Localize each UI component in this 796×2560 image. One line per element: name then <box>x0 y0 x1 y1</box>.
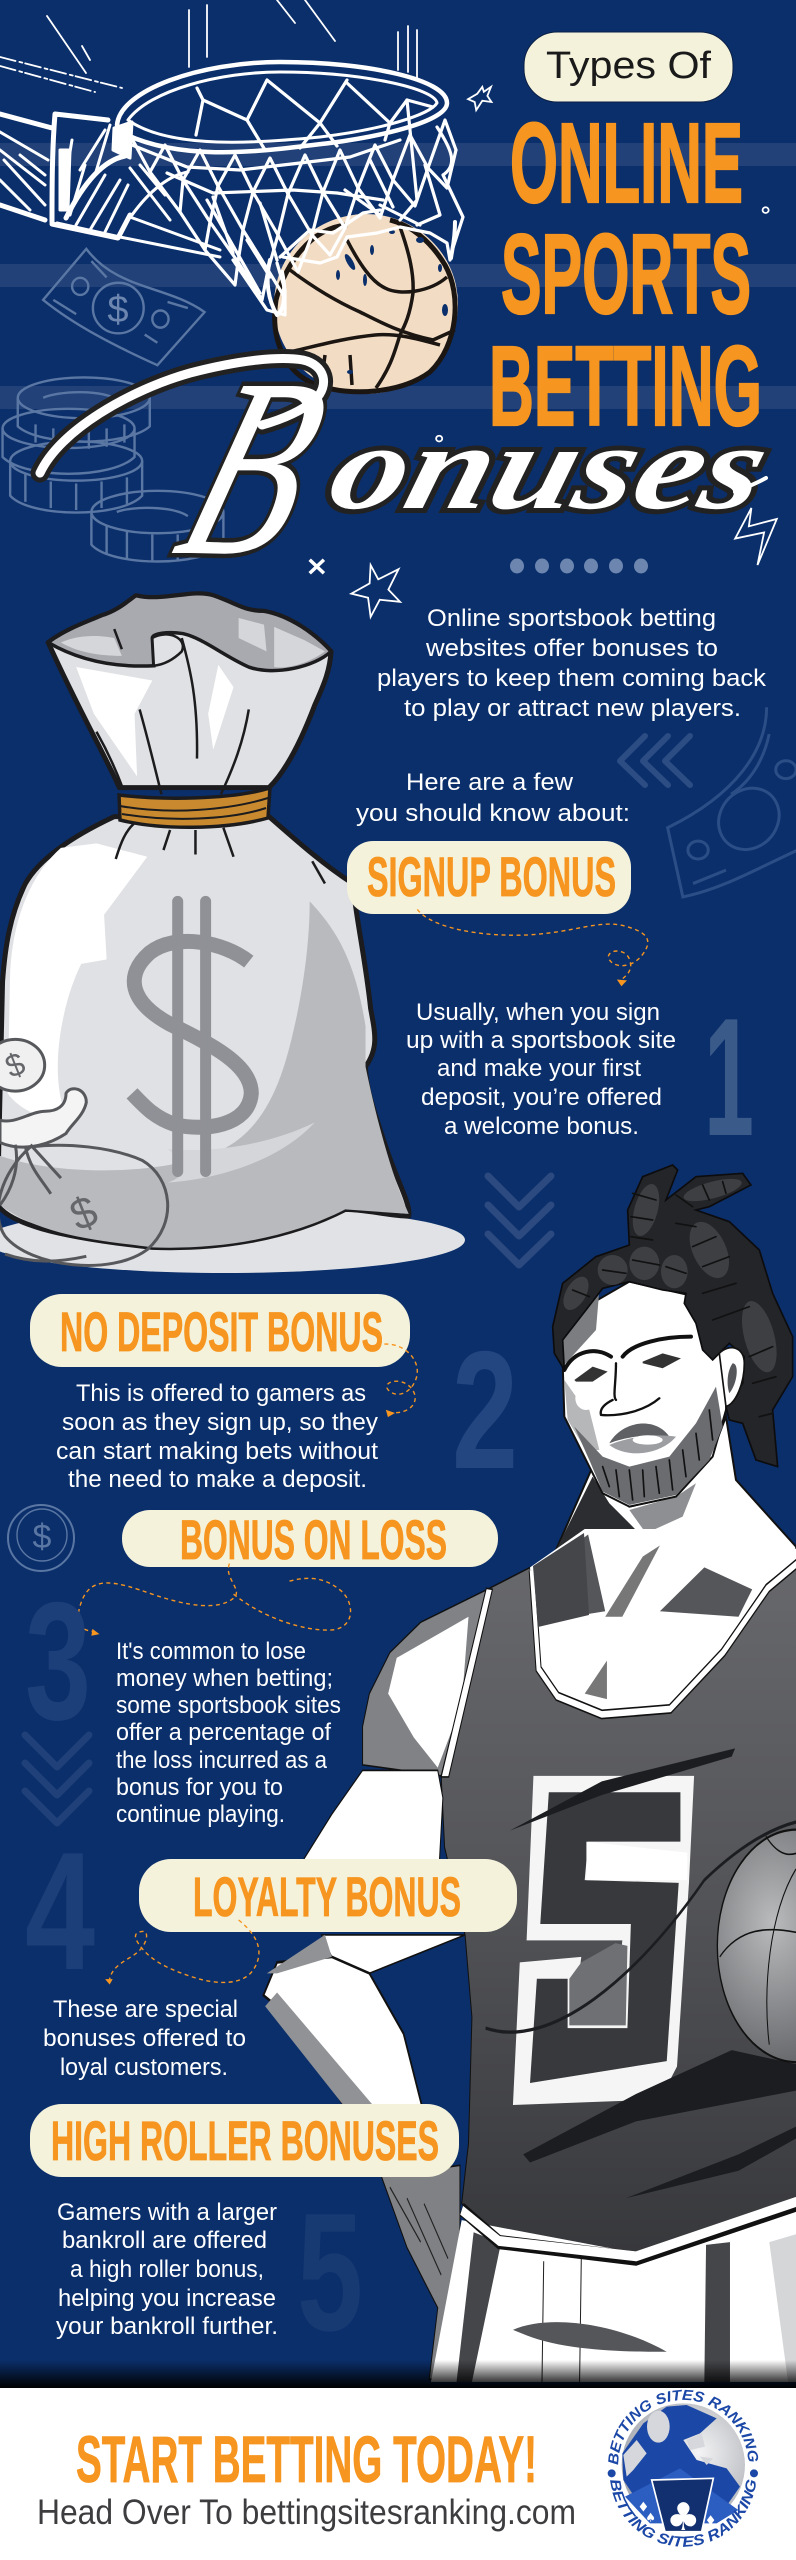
left trapezius and pec shading <box>533 1533 589 1627</box>
bonus on loss text <box>116 1638 341 1828</box>
neck and shoulders <box>536 1417 796 1577</box>
icon: dollar sign on bill: $ <box>107 289 129 331</box>
high roller text: Gamers with a larger <box>57 2199 277 2226</box>
high roller text: helping you increase <box>58 2285 276 2312</box>
number 1: 1 <box>704 983 754 1171</box>
logo: betting sites ranking: ♦ <box>705 2514 717 2529</box>
flourish on the B <box>40 359 324 473</box>
script title: Bonuses <box>40 326 783 608</box>
panel: high roller heading: HIGH ROLLER BONUSES <box>51 2109 439 2172</box>
basketball <box>274 214 458 394</box>
background stripes <box>0 143 796 409</box>
number 4: 4 <box>25 1817 95 2005</box>
pagination dots <box>510 558 648 574</box>
chevrons down <box>488 1176 551 1265</box>
website: Head Over To bettingsitesranking.com <box>37 2493 576 2532</box>
nose and lips <box>601 1363 659 1415</box>
eyes <box>574 1353 681 1382</box>
shoulder <box>363 1589 487 1776</box>
jersey <box>263 1529 796 2382</box>
number 3: 3 <box>25 1567 91 1755</box>
panel: loyalty bonus heading: LOYALTY BONUS <box>193 1865 461 1928</box>
ground shadow <box>0 1207 465 1273</box>
bag neck <box>48 594 331 788</box>
bag body <box>0 817 409 1248</box>
no deposit text: soon as they sign up, so they <box>62 1409 378 1436</box>
no deposit text: This is offered to gamers as <box>76 1380 366 1407</box>
chevrons down small <box>25 1735 89 1823</box>
inside of bag mouth <box>48 594 331 671</box>
arrow: bonus on loss dashed path <box>78 1564 351 1636</box>
forearm upper <box>303 1770 443 1861</box>
logo: betting sites ranking: ♦ <box>637 2501 649 2516</box>
high roller text: your bankroll further. <box>56 2313 278 2340</box>
beard <box>574 1387 723 1505</box>
signup text: a welcome bonus. <box>444 1113 639 1140</box>
ball held by player <box>717 1830 796 2062</box>
no deposit text <box>56 1380 378 1493</box>
no deposit text: can start making bets without <box>56 1438 378 1465</box>
bonus on loss text: some sportsbook sites <box>116 1692 341 1719</box>
neck folds <box>96 629 325 884</box>
loyalty text: bonuses offered to <box>43 2025 246 2052</box>
number 2: 2 <box>452 1316 518 1504</box>
number 5: 5 <box>297 2178 363 2366</box>
signup text: deposit, you’re offered <box>421 1084 662 1111</box>
panel: signup bonus heading <box>347 841 631 914</box>
eyebrows <box>564 1337 691 1370</box>
title pill: Types Of <box>524 32 733 102</box>
intro text: websites offer bonuses to <box>425 635 718 662</box>
logo: betting sites ranking: BETTING SITES RANKING <box>608 2390 758 2465</box>
loyalty text: loyal customers. <box>60 2054 228 2081</box>
chest skin <box>530 1529 796 1710</box>
bonus on loss text: money when betting; <box>116 1665 333 1692</box>
panel: footer <box>0 2388 796 2560</box>
bag shade <box>0 901 409 1248</box>
script title: Bonuses: onuses <box>317 399 783 535</box>
logo: betting sites ranking: BETTING SITES RANKING <box>610 2480 756 2547</box>
ear <box>719 1348 744 1407</box>
title pill: Types Of: Types Of <box>546 45 711 87</box>
no deposit text: the need to make a deposit. <box>68 1466 367 1493</box>
logo: betting sites ranking <box>608 2390 758 2547</box>
panel: high roller heading <box>30 2104 459 2177</box>
wrist <box>381 2165 460 2379</box>
loyalty text: These are special <box>53 1996 238 2023</box>
signup text: Usually, when you sign <box>416 999 660 1026</box>
chevrons left <box>620 736 690 785</box>
signup text: up with a sportsbook site <box>406 1027 676 1054</box>
shorts <box>431 2195 796 2382</box>
dollar sign on bag <box>132 901 251 1171</box>
cheek highlight shade <box>575 1387 597 1410</box>
icon: dollar bill outline <box>43 249 205 365</box>
panel: bonus on loss heading: BONUS ON LOSS <box>180 1508 447 1571</box>
icon: coin outline <box>8 1505 74 1571</box>
bonus on loss text: bonus for you to <box>116 1774 283 1801</box>
intro text: you should know about: <box>356 800 630 827</box>
arrow: no deposit dashed path <box>384 1344 417 1417</box>
arrow: signup dashed path <box>417 909 648 986</box>
rope tie <box>119 788 270 827</box>
background bill icon, right <box>668 707 796 897</box>
hair and head <box>553 1165 793 1507</box>
jersey hem <box>462 2201 796 2259</box>
logo: betting sites ranking: ♣ <box>666 2495 701 2540</box>
panel: bonus on loss heading <box>122 1508 498 1571</box>
bonus on loss text: It's common to lose <box>116 1638 306 1665</box>
panel: no deposit heading: NO DEPOSIT BONUS <box>60 1300 383 1363</box>
panel: no deposit heading <box>30 1294 410 1367</box>
neck highlight <box>76 665 234 776</box>
title: online sports betting <box>489 100 762 449</box>
rim <box>117 62 447 152</box>
intro text: Online sportsbook betting <box>427 605 716 632</box>
script title: Bonuses: B <box>152 326 356 608</box>
panel: loyalty bonus heading <box>139 1859 517 1932</box>
bonus on loss text: the loss incurred as a <box>116 1747 328 1774</box>
bonus on loss text: offer a percentage of <box>116 1719 331 1746</box>
forearm lower <box>263 1957 422 2108</box>
bag highlight <box>8 843 147 1125</box>
money bag <box>0 594 465 1273</box>
small money bag outline <box>0 1039 168 1265</box>
faint motion lines <box>0 0 417 92</box>
bottom fade <box>0 2360 796 2388</box>
intro text: players to keep them coming back <box>377 665 767 692</box>
basketball hoop and net <box>0 0 463 315</box>
arrow: loyalty dashed path <box>105 1920 259 1984</box>
icon: coin outline: $ <box>33 1518 52 1556</box>
high roller text: a high roller bonus, <box>70 2256 264 2283</box>
brush strokes <box>510 1748 796 2198</box>
intro text <box>356 605 767 827</box>
panel: signup bonus heading: SIGNUP BONUS <box>367 845 616 908</box>
hair <box>553 1165 793 1467</box>
small money bag outline: $ <box>63 1186 104 1241</box>
chest shading <box>537 1535 752 1622</box>
high roller text: bankroll are offered <box>62 2227 267 2254</box>
signup text <box>406 999 676 1140</box>
logo: betting sites ranking: ♠ <box>645 2511 656 2525</box>
signup text: and make your first <box>437 1055 641 1082</box>
basketball player <box>263 1165 796 2382</box>
decorative stars and sparks <box>310 87 777 617</box>
neckline trim <box>532 1555 796 1714</box>
jersey number 5 <box>513 1776 694 2105</box>
backboard bracket <box>0 114 220 257</box>
loyalty text <box>43 1996 246 2081</box>
intro text: to play or attract new players. <box>404 695 741 722</box>
intro text: Here are a few <box>406 769 574 796</box>
bonus on loss text: continue playing. <box>116 1801 285 1828</box>
high roller text <box>56 2199 278 2340</box>
icon: coin stack <box>3 377 223 562</box>
small money bag outline: $ <box>0 1045 30 1085</box>
net mesh <box>127 80 463 315</box>
